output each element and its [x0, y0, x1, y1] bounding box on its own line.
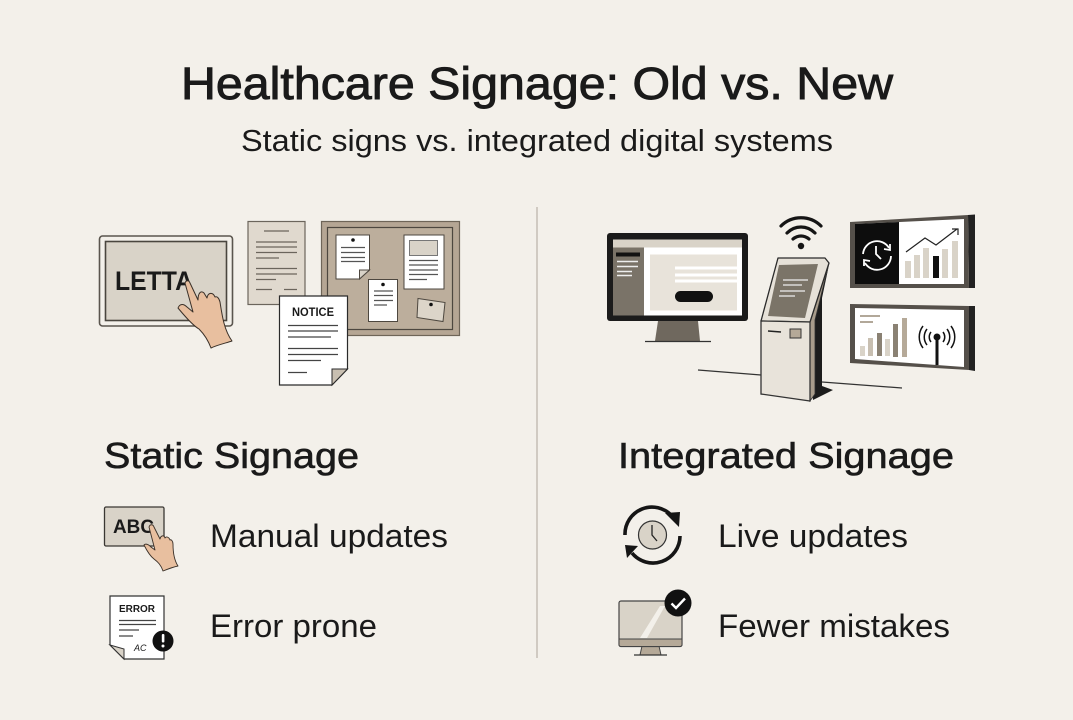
kiosk	[761, 258, 833, 401]
label: error prone: Error prone	[210, 608, 377, 644]
label: live updates: Live updates	[718, 518, 908, 554]
touch panel with hand: LETTA	[115, 266, 193, 296]
pinned note 2	[404, 235, 444, 289]
icon: error document	[110, 596, 174, 659]
touch panel with hand	[100, 236, 232, 348]
wall display top	[850, 214, 975, 288]
icon: error document: AC	[133, 643, 147, 653]
heading: static signage: Static Signage	[104, 435, 359, 476]
title: Healthcare Signage: Old vs. New	[181, 58, 893, 109]
cork notice board	[322, 222, 460, 336]
subtitle: Static signs vs. integrated digital systems	[241, 123, 833, 158]
wifi symbol	[781, 218, 821, 249]
desktop monitor	[607, 233, 748, 342]
illustration: static signage	[100, 222, 460, 385]
floor line	[698, 370, 902, 388]
icon: error document: ERROR	[119, 604, 156, 615]
icon: abc touch panel: ABC	[113, 517, 154, 538]
pinned note 1	[336, 235, 370, 279]
pinned card	[417, 298, 445, 322]
icon: abc touch panel	[104, 507, 178, 571]
notice sheet: NOTICE	[292, 305, 334, 319]
wall display bottom	[850, 304, 975, 371]
notice sheet	[280, 296, 348, 385]
illustration: integrated signage	[607, 214, 975, 401]
heading: integrated signage: Integrated Signage	[618, 435, 954, 476]
icon: monitor with check	[619, 590, 692, 655]
pinned note 3	[368, 280, 398, 322]
label: manual updates: Manual updates	[210, 518, 448, 554]
icon: clock with refresh arrows	[625, 507, 680, 563]
label: fewer mistakes: Fewer mistakes	[718, 608, 950, 644]
document behind	[248, 222, 305, 304]
